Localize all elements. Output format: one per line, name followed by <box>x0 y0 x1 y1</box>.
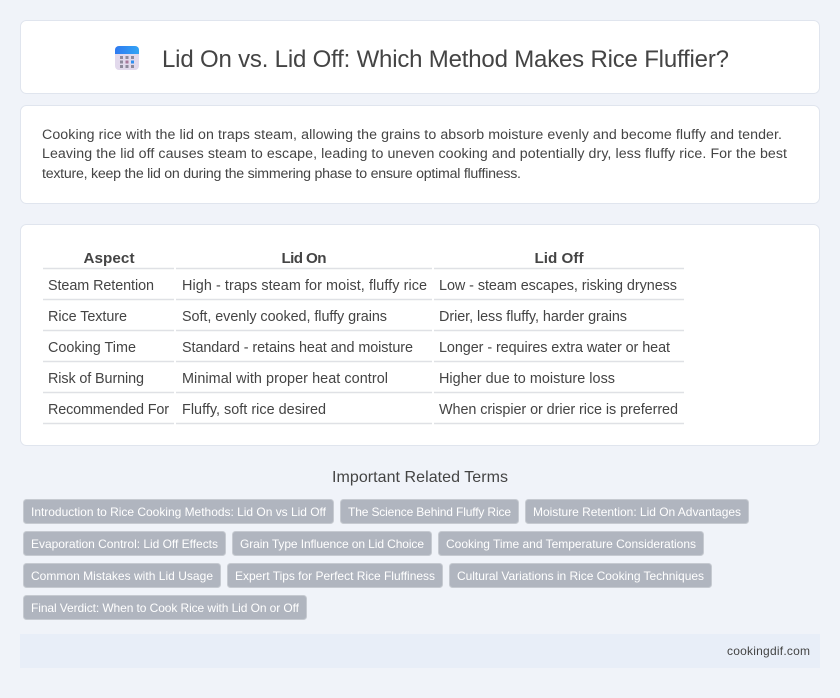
tag: Cooking Time and Temperature Considerations <box>446 537 696 551</box>
tag: Grain Type Influence on Lid Choice <box>240 537 424 551</box>
tag <box>340 500 518 524</box>
icon: calendar <box>115 46 139 70</box>
text block: introduction: Cooking rice with the lid on traps steam, allowing the grains to absorb moisture evenly and become fluffy and tender. <box>42 127 782 143</box>
table row: rice texture: Drier, less fluffy, harder grains <box>439 309 627 325</box>
text block: introduction: Leaving the lid off causes steam to escape, leading to uneven cooking and potentially dry, less fluffy rice. For the best <box>42 146 787 162</box>
panel: introduction <box>20 106 820 204</box>
table row: recommended for: Fluffy, soft rice desired <box>182 402 326 418</box>
text block: introduction: texture, keep the lid on during the simmering phase to ensure optimal fluffiness. <box>42 166 521 182</box>
table row: recommended for: When crispier or drier rice is preferred <box>439 402 678 418</box>
table row: cooking time: Standard - retains heat and moisture <box>182 340 413 356</box>
heading: related terms: Important Related Terms <box>332 469 508 486</box>
table row: risk of burning: Higher due to moisture loss <box>439 371 615 387</box>
tag: Cultural Variations in Rice Cooking Techniques <box>457 569 704 583</box>
table row: rice texture: Rice Texture <box>48 309 127 325</box>
panel: comparison table <box>20 224 820 446</box>
tag: Final Verdict: When to Cook Rice with Lid On or Off <box>31 601 300 615</box>
tag: Moisture Retention: Lid On Advantages <box>533 505 741 519</box>
tag <box>24 596 306 620</box>
table row: steam retention: High - traps steam for moist, fluffy rice <box>182 278 427 294</box>
table row: steam retention <box>48 278 677 294</box>
tag <box>24 532 226 556</box>
table header: Lid On <box>282 250 326 267</box>
tag <box>438 532 704 556</box>
table row: rice texture <box>48 309 627 325</box>
tag <box>24 564 220 588</box>
footer: cookingdif.com <box>727 644 810 658</box>
table header: Aspect <box>84 250 134 267</box>
table row: recommended for: Recommended For <box>48 402 169 418</box>
tag: Common Mistakes with Lid Usage <box>31 569 213 583</box>
tag <box>450 564 712 588</box>
table row: cooking time <box>48 340 670 356</box>
tag: Expert Tips for Perfect Rice Fluffiness <box>235 569 435 583</box>
tag: Introduction to Rice Cooking Methods: Lid On vs Lid Off <box>31 505 327 519</box>
table header: Lid Off <box>534 250 584 267</box>
title: Lid On vs. Lid Off: Which Method Makes Rice Fluffier? <box>162 46 729 73</box>
tag: Evaporation Control: Lid Off Effects <box>31 537 218 551</box>
text block: introduction <box>42 127 787 182</box>
footer <box>20 634 820 668</box>
table row: steam retention: Steam Retention <box>48 278 154 294</box>
tag <box>232 532 432 556</box>
panel: header <box>20 20 820 94</box>
table header <box>84 250 584 267</box>
table row: recommended for <box>48 402 678 418</box>
table row: risk of burning: Risk of Burning <box>48 371 144 387</box>
table row: rice texture: Soft, evenly cooked, fluffy grains <box>182 309 387 325</box>
table row: cooking time: Cooking Time <box>48 340 136 356</box>
tag list: related terms <box>24 500 748 620</box>
tag <box>526 500 748 524</box>
table row: cooking time: Longer - requires extra water or heat <box>439 340 670 356</box>
tag: The Science Behind Fluffy Rice <box>348 505 511 519</box>
table row: risk of burning <box>48 371 615 387</box>
table row: risk of burning: Minimal with proper heat control <box>182 371 388 387</box>
table row: steam retention: Low - steam escapes, risking dryness <box>439 278 677 294</box>
tag <box>24 500 334 524</box>
tag <box>228 564 442 588</box>
